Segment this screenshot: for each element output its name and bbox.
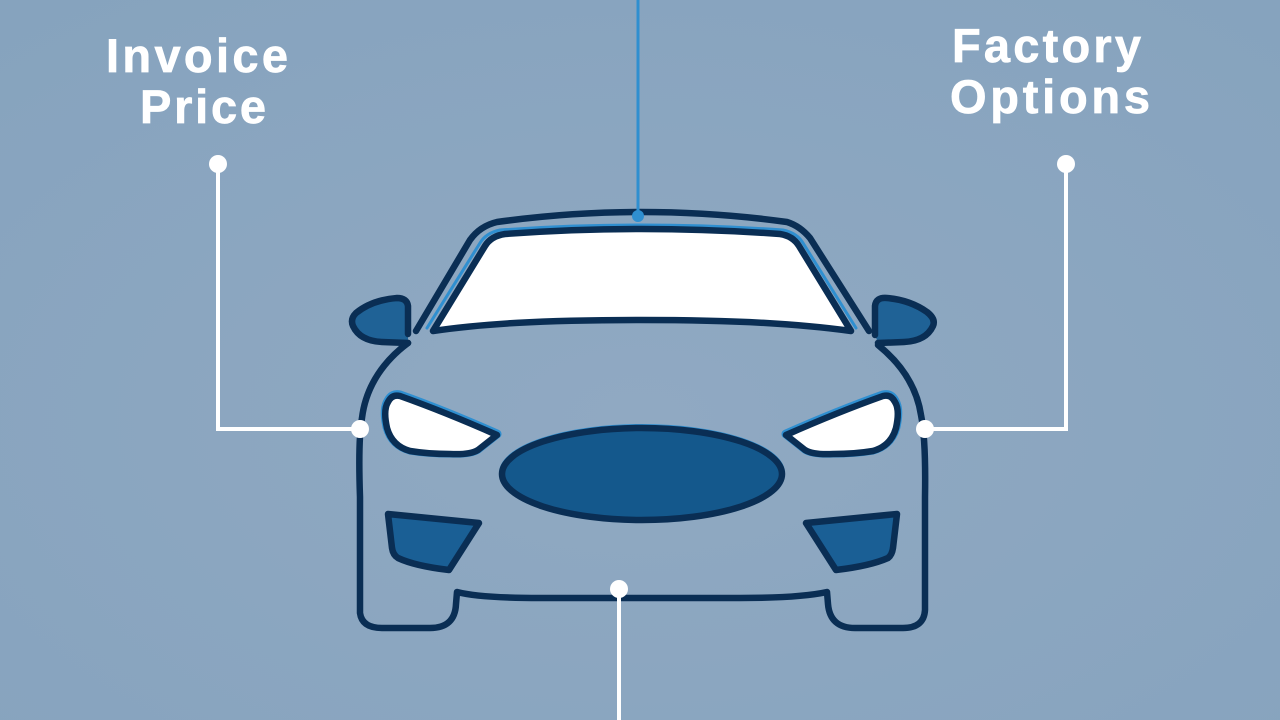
- heading: Factory Options: Options: [950, 70, 1150, 123]
- heading: Invoice Price: Invoice: [106, 29, 288, 82]
- car illustration: [352, 212, 934, 628]
- connector: bottom white line: [610, 580, 628, 720]
- roof outline: [416, 212, 869, 331]
- right fog lamp: [806, 514, 897, 570]
- car body outline: [359, 343, 925, 628]
- heading: Invoice Price: [106, 29, 288, 133]
- left headlight: [385, 395, 497, 454]
- right mirror: [875, 298, 934, 343]
- connector: top blue line: [632, 0, 644, 222]
- heading: Factory Options: Factory: [952, 19, 1141, 72]
- roof accent line: [427, 225, 856, 328]
- heading: Invoice Price: Price: [140, 80, 266, 133]
- connector: Invoice Price: [209, 155, 369, 438]
- left mirror: [352, 298, 408, 343]
- connector: Factory Options: [916, 155, 1075, 438]
- windshield: [433, 229, 851, 331]
- heading: Factory Options: [950, 19, 1150, 123]
- left fog lamp: [388, 514, 479, 570]
- grille: [501, 426, 783, 520]
- right headlight: [786, 395, 898, 454]
